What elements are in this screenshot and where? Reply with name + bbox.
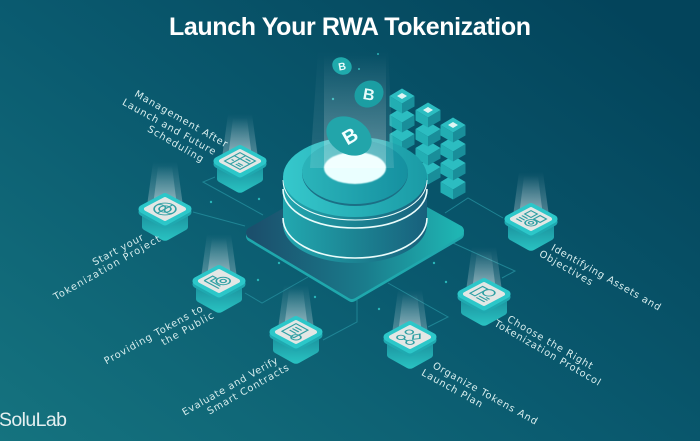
label: Launch Plan: [419, 368, 484, 410]
label: Tokenization Project: [51, 234, 163, 304]
icon: bitcoin coin large: [319, 108, 379, 164]
central cylinder: [283, 137, 427, 263]
step: management after launch: [120, 89, 263, 193]
step: evaluate smart contracts: [181, 285, 319, 418]
icon: start: [150, 201, 180, 217]
icon: bitcoin coin medium: B: [362, 86, 376, 105]
icon: management: [225, 153, 255, 169]
icon: evaluate: [280, 324, 312, 341]
label: the Public: [160, 311, 216, 348]
step: providing tokens: [103, 234, 242, 367]
label: Providing Tokens to: [103, 304, 205, 367]
step: choose protocol: [461, 247, 602, 388]
label: Launch and Future: [120, 97, 217, 158]
scattered dots: [210, 53, 447, 310]
label: Organize Tokens And: [430, 361, 539, 427]
light beam: [310, 50, 394, 168]
icon: bitcoin coin small: B: [337, 60, 347, 74]
step: start your tokenization project: [51, 162, 188, 304]
icon: identifying: [516, 211, 546, 227]
icon: bitcoin coin medium: [350, 75, 388, 113]
label: Choose the Right: [505, 314, 595, 372]
step: identifying assets: [508, 172, 662, 313]
label: Objectives: [537, 249, 594, 288]
step: organize tokens: [387, 290, 539, 427]
title: Launch Your RWA Tokenization: [169, 13, 531, 41]
icon: bitcoin coin large: B: [339, 124, 362, 150]
icon: bitcoin coin small: [329, 54, 355, 78]
label: Scheduling: [145, 124, 205, 165]
label: Management After: [132, 89, 230, 151]
logo: SoluLab: SoluLab: [0, 409, 67, 431]
icon: blockchain cube columns: [390, 88, 466, 200]
label: Evaluate and Verify: [181, 355, 280, 418]
label: Start your: [91, 232, 146, 268]
label: Smart Contracts: [206, 362, 291, 417]
icon: choose: [469, 286, 499, 302]
icon: providing: [204, 273, 233, 289]
label: Identifying Assets and: [549, 243, 662, 313]
connector lines: [193, 177, 515, 340]
icon: organize: [395, 329, 425, 345]
label: Tokenization Protocol: [491, 318, 602, 388]
platform: [252, 174, 458, 296]
